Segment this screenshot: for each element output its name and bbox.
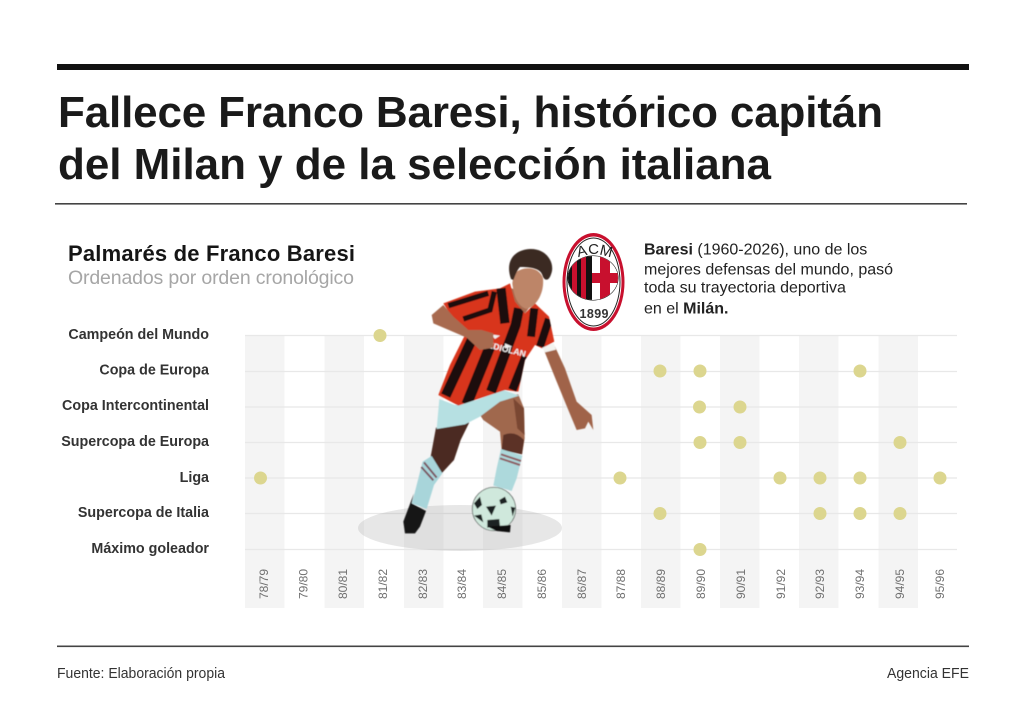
hair — [509, 249, 552, 280]
row labels: Supercopa de Europa — [61, 434, 210, 450]
bio text — [644, 242, 893, 318]
season bands — [245, 335, 918, 608]
front sock — [493, 449, 522, 491]
season labels: 81/82 — [376, 569, 390, 599]
left arm — [432, 305, 493, 350]
AC Milan crest: C — [588, 241, 599, 258]
top rule — [57, 64, 969, 70]
back leg — [431, 422, 469, 474]
back sock — [412, 456, 442, 509]
season labels: 82/83 — [416, 569, 430, 599]
back shoe — [403, 493, 426, 533]
season labels: 83/84 — [455, 569, 469, 599]
source: Fuente: Elaboración propia — [57, 665, 226, 682]
row labels: Copa Intercontinental — [62, 398, 209, 414]
chart heading — [68, 241, 355, 289]
chart heading: Palmarés de Franco Baresi — [68, 241, 355, 266]
season labels: 91/92 — [774, 569, 788, 599]
bio text: toda su trayectoria deportiva — [644, 280, 846, 296]
row labels — [61, 327, 210, 557]
season labels: 79/80 — [296, 569, 310, 599]
title rule — [55, 203, 967, 205]
row labels: Máximo goleador — [91, 541, 209, 557]
AC Milan crest: M — [598, 242, 614, 261]
jersey — [438, 282, 555, 406]
title — [58, 88, 883, 189]
dot matrix chart — [61, 327, 957, 608]
season labels: 86/87 — [575, 569, 589, 599]
season labels — [257, 569, 947, 599]
season labels: 89/90 — [694, 569, 708, 599]
season labels: 87/88 — [614, 569, 628, 599]
face — [512, 268, 543, 309]
row labels: Campeón del Mundo — [68, 327, 209, 343]
season labels: 78/79 — [257, 569, 271, 599]
title: Fallece Franco Baresi, histórico capitán — [58, 88, 883, 137]
row labels: Supercopa de Italia — [78, 505, 210, 521]
ball — [472, 487, 516, 531]
bio text: en el Milán. — [644, 300, 728, 318]
shorts — [437, 390, 519, 429]
credit: Agencia EFE — [887, 665, 969, 682]
front leg — [480, 394, 525, 454]
title: del Milan y de la selección italiana — [58, 140, 772, 189]
chart heading: Ordenados por orden cronológico — [68, 267, 354, 289]
season labels: 93/94 — [853, 569, 867, 599]
neck — [508, 287, 535, 313]
bio text: Baresi (1960-2026), uno de los — [644, 242, 867, 258]
player shadow — [358, 505, 562, 551]
season labels: 88/89 — [654, 569, 668, 599]
season labels: 84/85 — [495, 569, 509, 599]
AC Milan crest: A — [575, 242, 589, 261]
player illustration — [403, 249, 593, 533]
right arm — [544, 347, 593, 430]
sponsor: EDIOLAN — [487, 340, 527, 359]
row labels: Copa de Europa — [99, 362, 210, 378]
season labels: 95/96 — [933, 569, 947, 599]
captain band — [542, 343, 556, 352]
season labels: 92/93 — [813, 569, 827, 599]
footer rule — [57, 646, 969, 647]
season labels: 94/95 — [893, 569, 907, 599]
upper body — [432, 249, 593, 430]
season labels: 85/86 — [535, 569, 549, 599]
AC Milan crest — [562, 233, 624, 331]
lower body — [403, 390, 525, 533]
season labels: 90/91 — [734, 569, 748, 599]
season labels: 80/81 — [336, 569, 350, 599]
title dots — [254, 329, 946, 556]
row labels: Liga — [180, 470, 210, 486]
AC Milan crest: 1899 — [580, 307, 609, 321]
bio text: mejores defensas del mundo, pasó — [644, 262, 893, 278]
